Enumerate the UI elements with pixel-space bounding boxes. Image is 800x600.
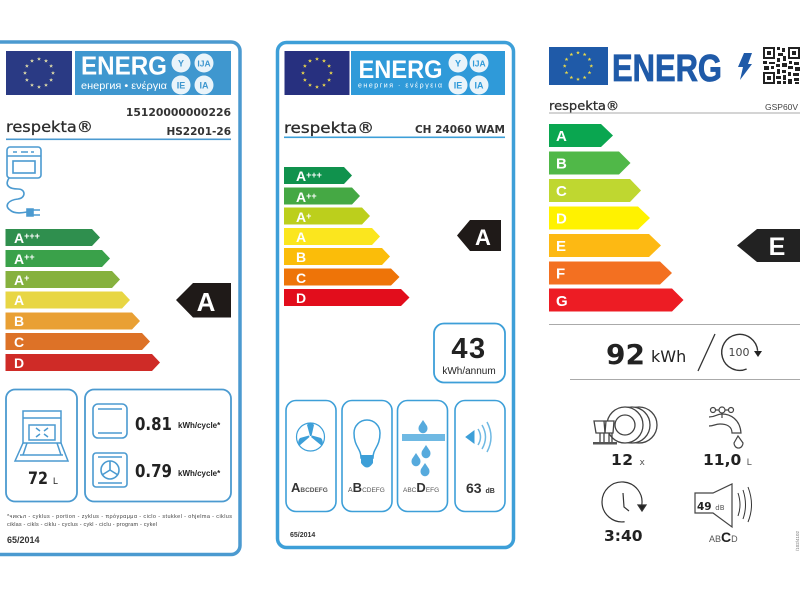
annual consumption box: kWh/annum [442, 366, 496, 377]
rating arrow A [176, 283, 231, 318]
energy header banner: IE [177, 80, 185, 90]
energy scale bars: A [14, 272, 24, 288]
panel: oven volume [6, 390, 77, 502]
icon: oven with plug [7, 147, 41, 216]
energy header banner: IA [474, 80, 484, 90]
duration value: 3:40 [604, 527, 643, 545]
brand logo: respekta® [549, 99, 619, 113]
panel: energy per cycle [85, 390, 231, 502]
energy scale bars: A [296, 168, 306, 184]
model number: GSP60V [765, 102, 798, 112]
energy scale bars: D [296, 290, 306, 306]
energy header banner: IJA [197, 58, 211, 68]
energy scale bars: +++ [306, 170, 322, 180]
energy scale bars: ++ [24, 252, 35, 262]
panel: noise level [455, 400, 505, 512]
icon: programme duration [599, 479, 646, 525]
energy scale bars: A [14, 251, 24, 267]
panel: lighting efficiency: ABCDEFG [348, 480, 385, 495]
energy header banner: Y [178, 58, 184, 68]
energy header banner: енергия • ενέργια [81, 80, 167, 92]
energy header banner: ENERG [358, 56, 442, 84]
regulation number: 65/2014 [7, 535, 40, 545]
energy scale bars: + [306, 211, 311, 221]
energy scale bars: +++ [24, 231, 40, 241]
energy header banner: ENERG [81, 50, 167, 80]
label border [0, 42, 240, 554]
serial number: 15120000000226 [126, 106, 231, 119]
energy header banner: енергия · ενέργεια [358, 82, 442, 90]
energy header banner [75, 50, 231, 95]
rating arrow E: E [769, 233, 785, 261]
icon: per 100 cycles [718, 331, 762, 374]
icon: lightning bolt [738, 53, 752, 80]
energy scale bars: A [14, 292, 24, 308]
panel: noise level: 63 dB [466, 480, 495, 496]
panel: energy per cycle: kWh/cycle* [178, 421, 221, 430]
brand logo: respekta® [284, 119, 374, 137]
energy header banner [351, 51, 505, 95]
energy scale bars: ++ [306, 191, 317, 201]
panel: grease filtering [398, 400, 448, 512]
footnote: *чикъл - cyklus - portion - zyklus - πρόγραμμα - ciclo - stukkel - ohjelma - ciklus [7, 513, 232, 520]
rating arrow A [457, 220, 501, 251]
energy scale bars [6, 229, 160, 371]
regulation number: 65/2014 [290, 532, 315, 539]
energy scale bars: A [556, 128, 567, 145]
panel: oven volume: L [53, 476, 58, 486]
icon: per 100 cycles: 100 [728, 346, 750, 359]
label border [278, 42, 514, 548]
energy scale bars: B [556, 156, 567, 172]
panel: fan efficiency: ABCDEFG [291, 480, 328, 495]
energy scale bars: A [296, 189, 306, 205]
EU flag [6, 51, 72, 95]
annual consumption box [434, 324, 505, 382]
footnote: ciklas - cikls - ciklu - cyclus - cykl - ciclu - program - cykel [7, 522, 157, 528]
icon: noise speaker: 49 dB [697, 501, 725, 513]
energy scale bars: + [24, 273, 29, 283]
energy scale bars: C [14, 334, 24, 350]
ENERG heading: ENERG [612, 48, 722, 90]
energy scale bars: D [556, 210, 567, 228]
energy scale bars: A [296, 229, 306, 245]
panel: energy per cycle: 0.81 [135, 414, 172, 435]
energy scale bars: B [14, 313, 24, 329]
panel: dishwasher energy label [549, 47, 800, 551]
panel: energy per cycle: kWh/cycle* [178, 469, 221, 478]
energy scale bars [549, 124, 684, 312]
panel: fan efficiency [286, 400, 336, 512]
energy scale bars: G [556, 293, 568, 310]
model number: HS2201-26 [166, 126, 231, 138]
icon: water tap [709, 407, 743, 448]
panel: oven volume: 72 [28, 469, 48, 489]
energy header banner: IJA [472, 58, 486, 68]
energy scale bars: E [556, 238, 566, 255]
noise class: ABCD [709, 529, 738, 545]
EU flag [284, 51, 350, 95]
energy scale bars: A [14, 230, 24, 246]
icon: noise speaker [695, 484, 752, 527]
panel: lighting efficiency [342, 400, 392, 512]
energy scale bars: D [14, 355, 24, 371]
rating arrow E [737, 229, 800, 262]
panel: oven energy label [0, 42, 240, 554]
EU flag [549, 47, 608, 85]
annual consumption box: 43 [451, 333, 487, 365]
energy scale bars: C [296, 270, 306, 286]
annual energy consumption: 92 [606, 338, 645, 371]
panel: grease filtering: ABCDEFG [403, 480, 439, 495]
icon: place settings [593, 407, 657, 444]
energy scale bars: A [296, 209, 306, 225]
rating arrow A: A [197, 287, 216, 317]
panel: energy per cycle: 0.79 [135, 461, 172, 482]
water value: 11,0 L [703, 451, 752, 469]
model number: CH 24060 WAM [415, 124, 505, 136]
rating arrow A: A [475, 225, 491, 250]
energy header banner: Y [455, 58, 461, 68]
panel: cooker hood energy label [278, 42, 514, 548]
energy header banner: IA [200, 80, 209, 90]
energy scale bars: B [296, 249, 306, 265]
annual energy consumption: kWh [651, 347, 686, 366]
brand logo: respekta® [6, 118, 93, 136]
annual energy consumption [606, 334, 715, 371]
side reference code: /102/4102 [795, 530, 800, 551]
energy scale bars: F [556, 266, 565, 282]
energy header banner: IE [454, 80, 462, 90]
energy scale bars [284, 167, 410, 306]
QR code [763, 47, 800, 84]
footnote [7, 513, 232, 528]
energy scale bars: C [556, 183, 567, 200]
place settings value: 12 x [611, 451, 645, 469]
